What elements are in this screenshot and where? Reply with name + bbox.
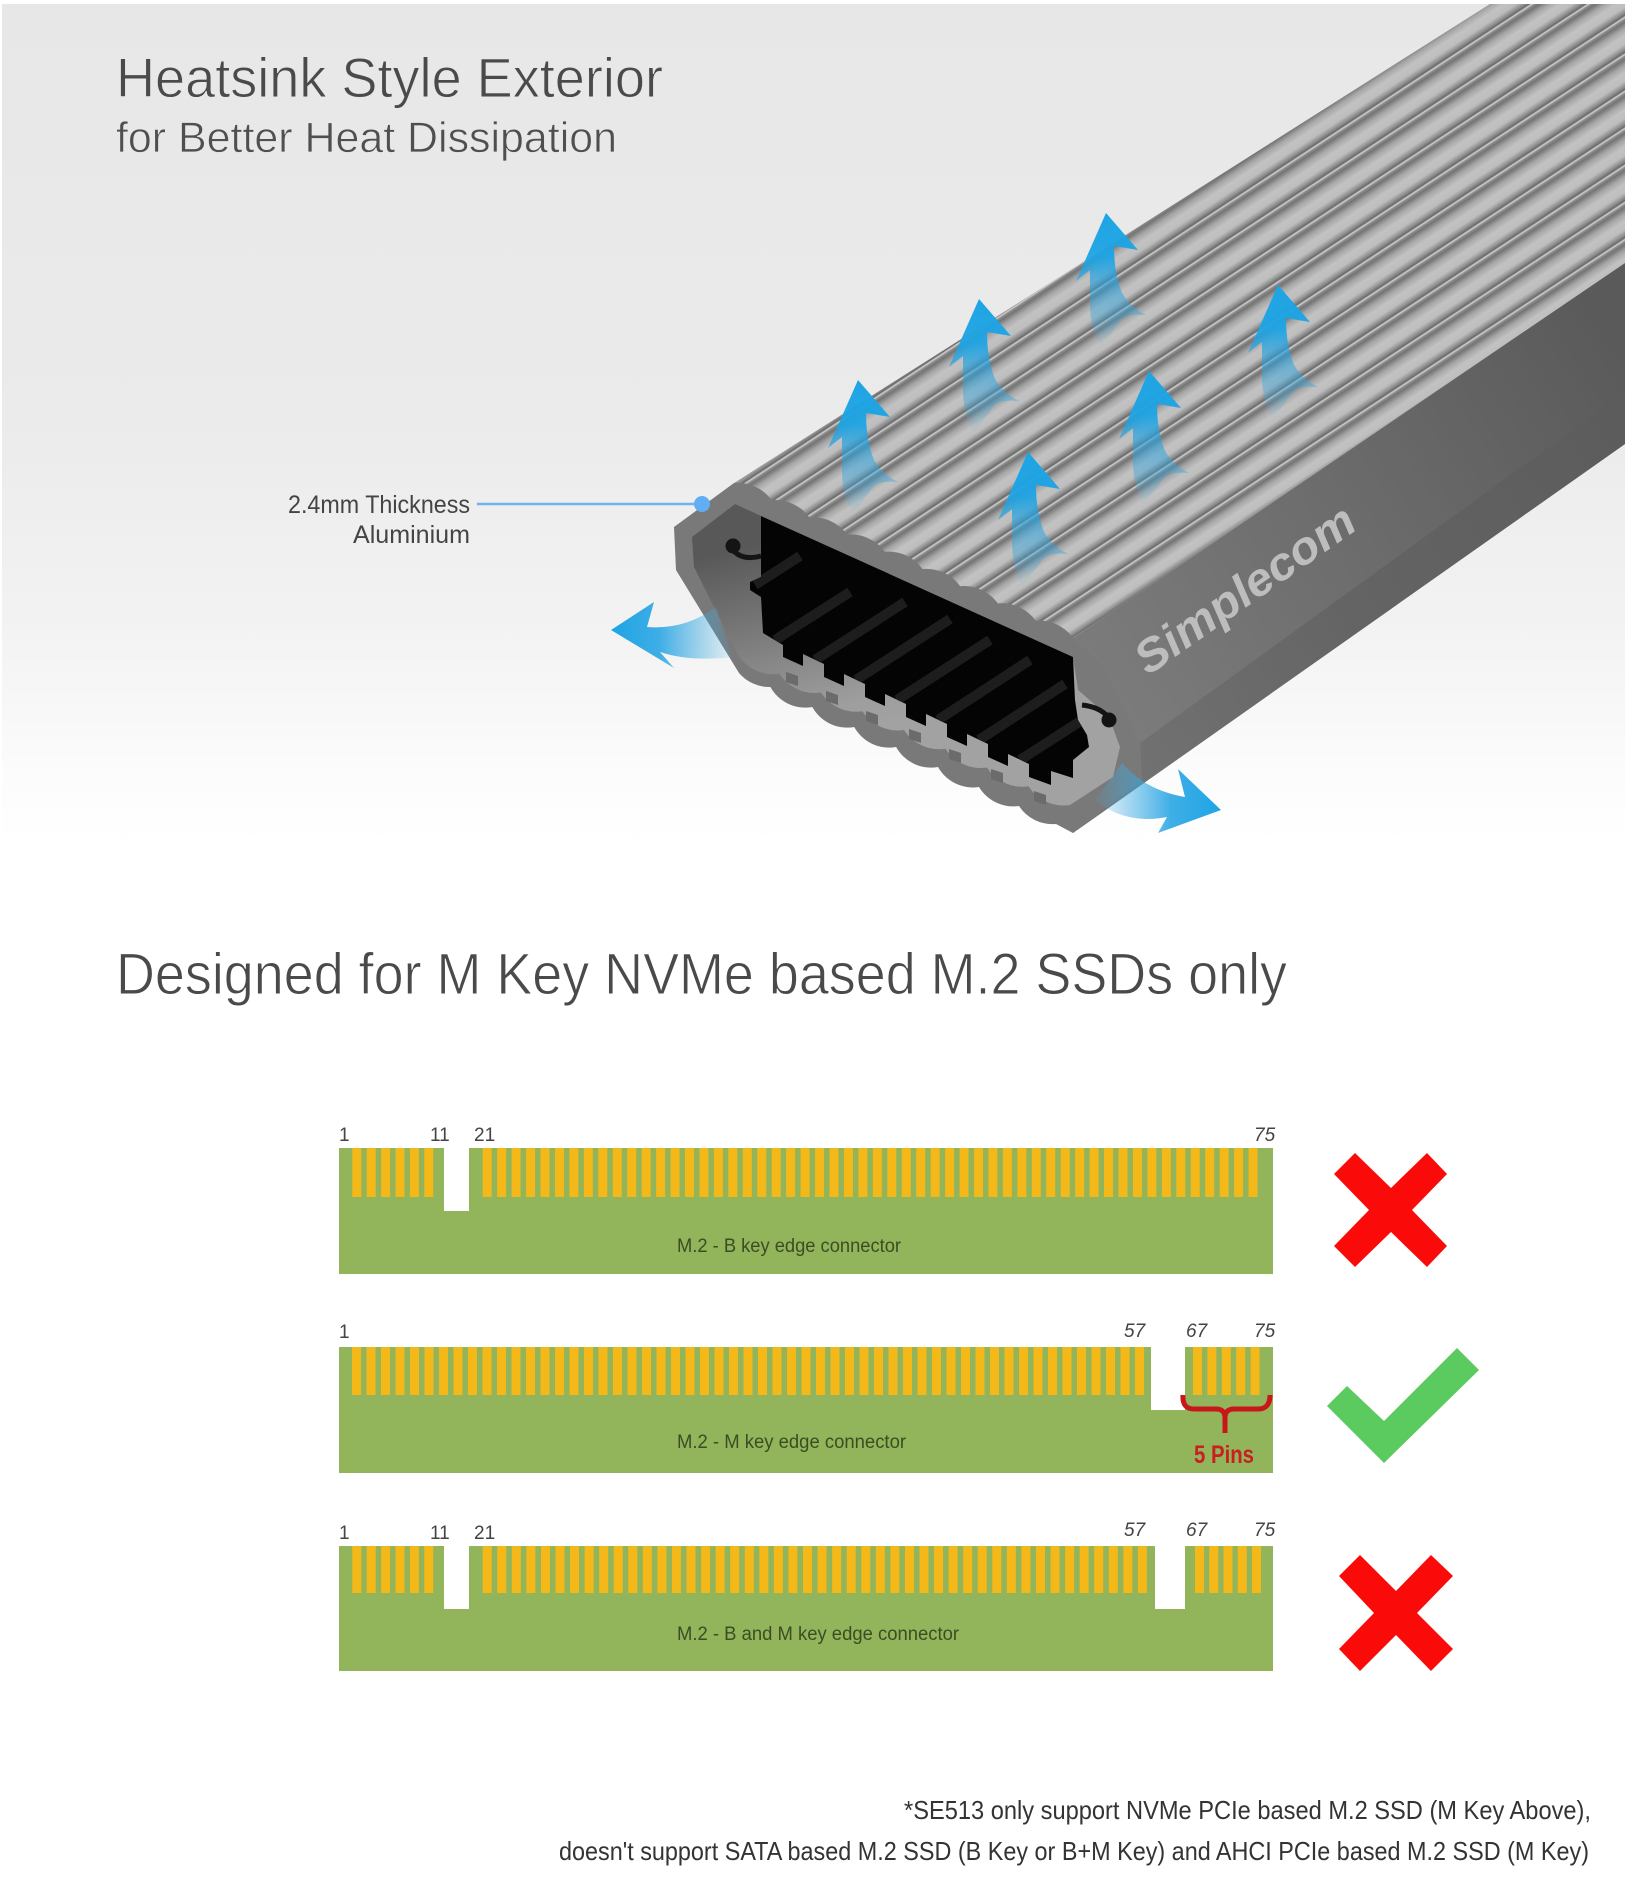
airflow arrow: [828, 380, 898, 513]
black hollow interior: [750, 516, 1089, 785]
pin numbers: [339, 1520, 1276, 1544]
connector label: M.2 - B and M key edge connector: [677, 1624, 960, 1645]
pin numbers: 1: [339, 1523, 350, 1544]
pin numbers: 75: [1254, 1520, 1276, 1541]
connector: B key: [339, 1125, 1276, 1274]
pin numbers: 21: [474, 1523, 495, 1544]
pin numbers: 67: [1186, 1520, 1209, 1541]
enclosure illustration: [674, 4, 1625, 833]
pin numbers: 67: [1186, 1321, 1209, 1342]
airflow arrow: [1248, 285, 1318, 418]
pin numbers: [339, 1321, 1276, 1343]
slots: [728, 541, 1114, 725]
5 pins text: 5 Pins: [1194, 1441, 1254, 1469]
end face rim: [674, 483, 1142, 833]
brand logo: Simplecom: [1124, 494, 1365, 684]
connector label: M.2 - B key edge connector: [677, 1236, 902, 1257]
pin numbers: 75: [1254, 1321, 1276, 1342]
pin numbers: [339, 1125, 1276, 1146]
gold pins: [352, 1546, 1261, 1593]
gold pins: [352, 1148, 1261, 1197]
airflow arrow: [998, 452, 1068, 585]
airflow arrow: [1076, 213, 1146, 346]
heading: heatsink style exterior: Heatsink Style Exterior: [116, 46, 663, 109]
circuit board: [339, 1148, 1273, 1274]
connector: B and M key: [339, 1520, 1276, 1671]
footnote: [559, 1795, 1591, 1866]
side face: [1073, 263, 1625, 833]
end face recess: [692, 504, 1120, 805]
small tooth recesses: [786, 672, 1046, 805]
connector: M key: [339, 1321, 1276, 1473]
connector label: M.2 - M key edge connector: [677, 1432, 907, 1453]
icon: red cross: [1339, 1555, 1453, 1671]
gold pins: [352, 1347, 1261, 1395]
side chamfer: [1073, 392, 1625, 833]
pin numbers: 21: [474, 1125, 495, 1146]
heading: designed for M key: Designed for M Key NVMe based M.2 SSDs only: [116, 942, 1287, 1007]
airflow arrow: [949, 299, 1019, 432]
pin numbers: 57: [1124, 1321, 1147, 1342]
callout: 2.4mm thickness aluminium: 2.4mm Thickness: [288, 491, 470, 519]
5 pins brace: [1183, 1395, 1270, 1433]
ribbed top surface: [734, 4, 1625, 638]
pin numbers: 1: [339, 1322, 350, 1343]
circuit board: [339, 1347, 1273, 1473]
callout: 2.4mm thickness aluminium: Aluminium: [353, 521, 470, 549]
icon: green check: [1327, 1348, 1479, 1463]
pin numbers: 75: [1254, 1125, 1276, 1146]
airflow arrow: right: [1095, 763, 1221, 833]
callout: 2.4mm thickness aluminium: [288, 491, 710, 549]
airflow arrow: [1119, 371, 1189, 504]
panel: heatsink exterior background: [2, 4, 1625, 845]
icon: red cross: [1334, 1153, 1447, 1267]
pin numbers: 1: [339, 1125, 350, 1146]
heading: heatsink style exterior: [116, 46, 663, 162]
pin numbers: 11: [430, 1523, 450, 1544]
airflow arrow: left: [611, 602, 732, 668]
pin numbers: 57: [1124, 1520, 1147, 1541]
heading: heatsink style exterior: for Better Heat Dissipation: [116, 114, 617, 162]
circuit board: [339, 1546, 1273, 1671]
pin numbers: 11: [430, 1125, 450, 1146]
